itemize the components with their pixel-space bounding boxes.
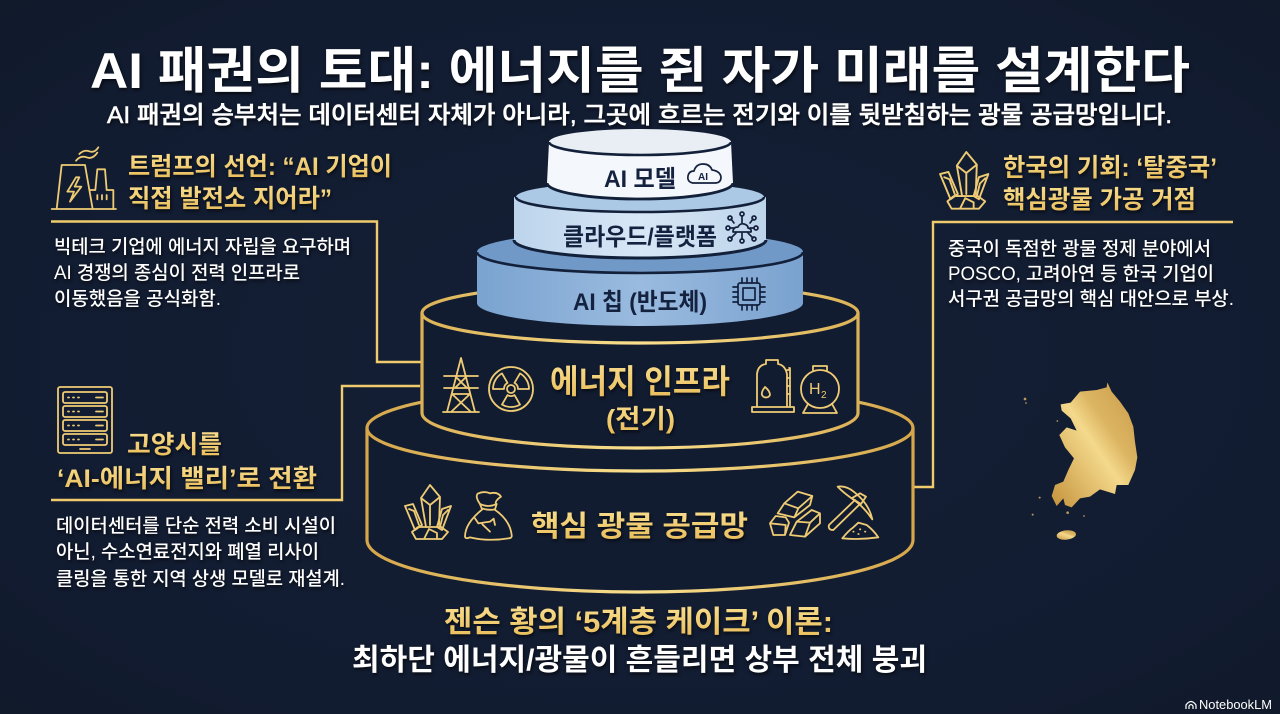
tier 4: energy infrastructure: [422, 283, 858, 448]
label: 에너지 인프라: [550, 363, 730, 400]
icon: transmission tower: [443, 358, 479, 412]
leader line: Goyang panel to energy tier: [51, 386, 420, 500]
icon: cloud network: [726, 212, 758, 243]
icon: gold bars: [770, 492, 820, 537]
label: AI 모델: [604, 166, 676, 193]
body text: [56, 515, 345, 590]
icon: crystal: [940, 152, 988, 209]
icon: pickaxe: [829, 486, 878, 539]
tier 5: critical minerals: [367, 385, 913, 592]
heading: 트럼프의 선언: “AI 기업이: [128, 153, 392, 181]
icon: server rack: [58, 387, 112, 453]
heading: [1003, 154, 1217, 214]
body text: 데이터센터를 단순 전력 소비 시설이: [56, 515, 336, 537]
body text: AI 경쟁의 종심이 전력 인프라로: [54, 262, 300, 284]
leader line: Korea panel to minerals tier: [912, 222, 1233, 487]
body text: [54, 236, 351, 310]
icon: AI cloud: AI: [698, 172, 708, 183]
icon: AI cloud: [688, 164, 721, 183]
icon: hydrogen tank: 2: [821, 390, 827, 401]
panel: Korea opportunity: [940, 152, 1234, 310]
icon: radiation symbol: [489, 367, 533, 411]
icon: hydrogen tank: H: [809, 381, 821, 398]
bottom conclusion: 최하단 에너지/광물이 흔들리면 상부 전체 붕괴: [352, 644, 927, 677]
heading: 핵심광물 가공 거점: [1003, 186, 1196, 214]
body text: 중국이 독점한 광물 정제 분야에서: [948, 238, 1211, 260]
icon: chip: [733, 278, 765, 310]
body text: 클링을 통한 지역 상생 모델로 재설계.: [56, 568, 345, 590]
icon: hydrogen tank: [801, 366, 839, 413]
heading: 고양시를: [127, 431, 222, 459]
icon: storage tank: [752, 360, 794, 412]
tier 1: AI model: [547, 129, 733, 199]
icon: crystal: [405, 485, 451, 539]
map: South Korea in gold: [1024, 382, 1137, 541]
subtitle: AI 패권의 승부처는 데이터센터 자체가 아니라, 그곳에 흐르는 전기와 이를 뒷받침하는 광물 공급망입니다.: [107, 102, 1172, 129]
label: (전기): [606, 404, 675, 434]
heading: 직접 발전소 지어라”: [128, 185, 332, 213]
title: AI 패권의 토대: 에너지를 쥔 자가 미래를 설계한다: [90, 43, 1190, 99]
label: AI 칩 (반도체): [573, 289, 707, 316]
icon: power plant: [52, 147, 116, 209]
body text: POSCO, 고려아연 등 한국 기업이: [948, 263, 1214, 285]
heading: [128, 153, 392, 213]
label: 핵심 광물 공급망: [531, 510, 748, 543]
body text: [948, 238, 1234, 310]
label: [550, 363, 730, 434]
body text: 서구권 공급망의 핵심 대안으로 부상.: [948, 288, 1234, 310]
heading: ‘AI-에너지 밸리’로 전환: [57, 465, 317, 493]
body text: 아닌, 수소연료전지와 폐열 리사이: [56, 541, 319, 563]
NotebookLM badge: NotebookLM: [1199, 697, 1272, 712]
body text: 빅테크 기업에 에너지 자립을 요구하며: [54, 236, 351, 258]
heading: 한국의 기회: ‘탈중국’: [1003, 154, 1217, 182]
tier 2: cloud / platform: [514, 182, 766, 258]
tier 3: AI chip: [477, 231, 803, 326]
leader line: Trump panel to energy tier: [51, 222, 424, 362]
label: 클라우드/플랫폼: [563, 224, 717, 251]
heading: [57, 431, 317, 493]
bottom conclusion: 젠슨 황의 ‘5계층 케이크’ 이론:: [444, 606, 833, 639]
panel: Goyang city: [56, 387, 345, 590]
panel: Trump declaration: [52, 147, 392, 310]
icon: ore bag: [465, 492, 512, 540]
body text: 이동했음을 공식화함.: [54, 288, 221, 310]
bottom conclusion: [352, 606, 927, 677]
